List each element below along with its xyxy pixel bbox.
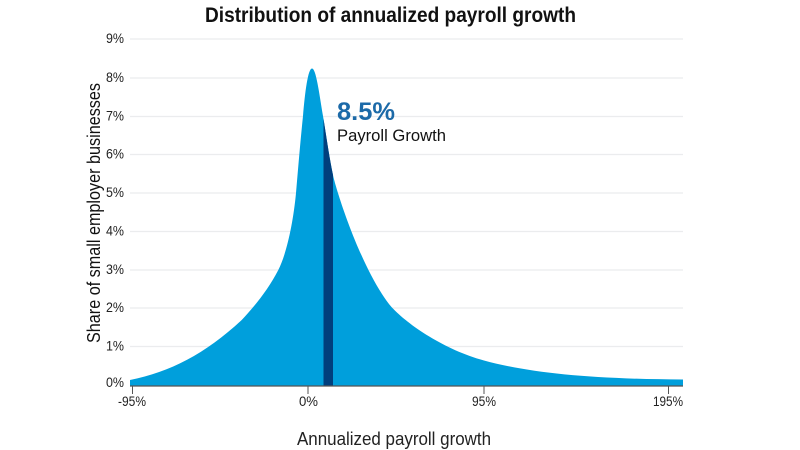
- x axis labels: 95%: [472, 393, 496, 409]
- y axis labels: 3%: [106, 261, 124, 277]
- distribution area: [130, 68, 683, 386]
- x axis labels: -95%: [118, 393, 146, 409]
- x axis labels: 195%: [653, 393, 683, 409]
- infographic chart: [86, 6, 683, 449]
- x axis: [130, 386, 683, 394]
- y axis labels: 6%: [106, 146, 124, 162]
- y axis labels: 0%: [106, 374, 124, 390]
- y axis labels: 8%: [106, 69, 124, 85]
- x axis title: Annualized payroll growth: [297, 429, 491, 449]
- title: Distribution of annualized payroll growth: [205, 4, 576, 27]
- y axis title: Share of small employer businesses: [84, 83, 104, 343]
- y axis labels: 2%: [106, 299, 124, 315]
- gridlines: [130, 39, 683, 346]
- callout label: Payroll Growth: [337, 126, 446, 145]
- highlighted band at 8.500%: [324, 119, 333, 386]
- x axis labels: [118, 393, 683, 409]
- x axis labels: 0%: [299, 393, 318, 409]
- y axis labels: 4%: [106, 222, 124, 238]
- callout: [337, 98, 446, 145]
- y axis labels: 7%: [106, 108, 124, 124]
- y axis labels: 1%: [106, 338, 124, 354]
- y axis labels: 5%: [106, 184, 124, 200]
- y axis labels: [106, 30, 124, 390]
- callout value: 8.5%: [337, 98, 395, 126]
- y axis labels: 9%: [106, 30, 124, 46]
